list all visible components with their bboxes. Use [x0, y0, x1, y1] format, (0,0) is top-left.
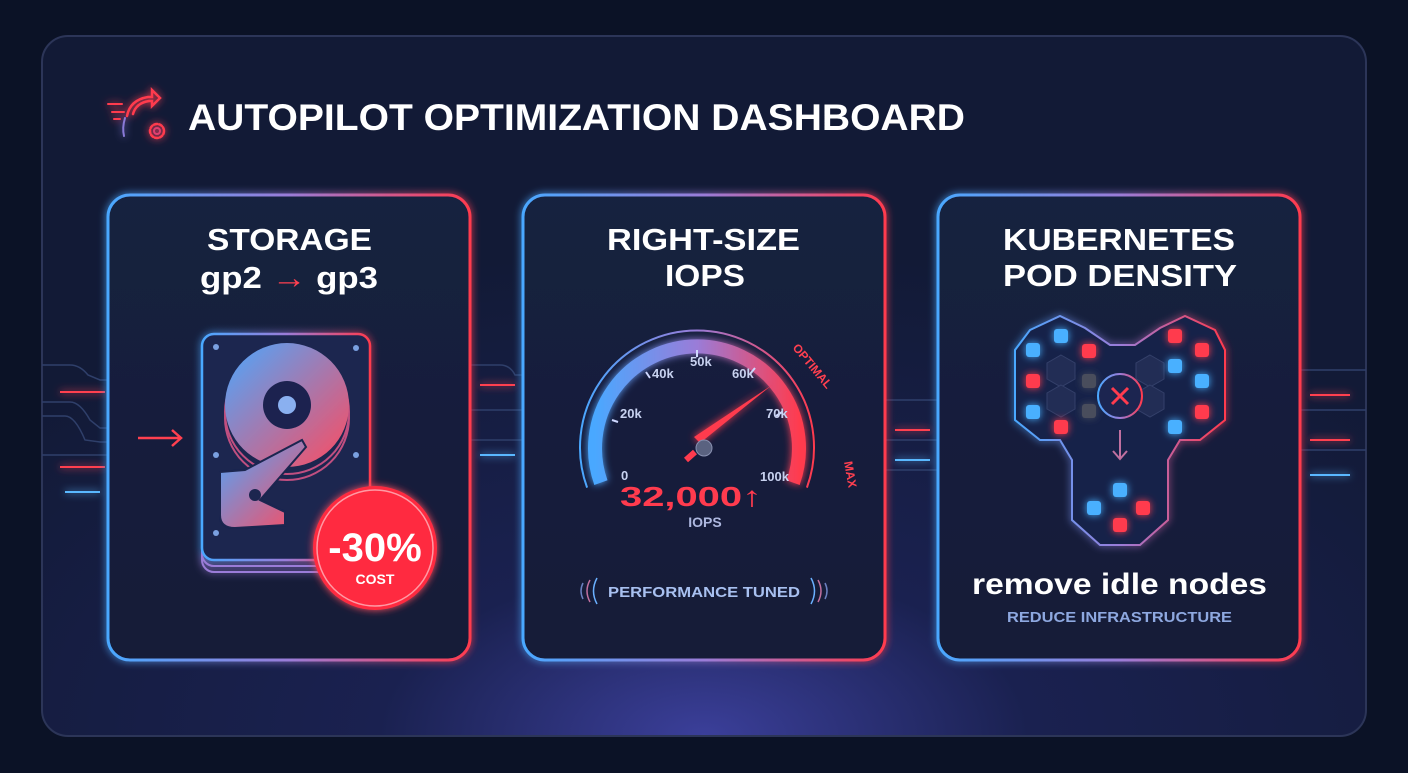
needle — [694, 385, 772, 443]
label: performance tuned — [581, 578, 827, 604]
panel: kubernetes — [938, 195, 1300, 660]
gauge: 70k — [766, 406, 788, 421]
heading: storage: STORAGE — [207, 222, 372, 257]
panel: kubernetes: REDUCE INFRASTRUCTURE — [1007, 609, 1232, 626]
badge: -30% cost: COST — [356, 571, 395, 587]
gauge: 0 — [621, 468, 628, 483]
badge: -30% cost — [313, 486, 437, 610]
badge: -30% cost: -30% — [328, 526, 422, 570]
gauge: 20k — [620, 406, 642, 421]
value: 32,000 iops: 32,000↑ — [620, 481, 762, 512]
panel: storage — [108, 195, 470, 660]
gauge: OPTIMAL — [790, 341, 835, 391]
icon: autopilot arrow gear — [108, 90, 164, 138]
gauge: 100k — [760, 469, 790, 484]
panel: right-size iops: IOPS — [688, 514, 722, 530]
gauge: MAX — [841, 460, 859, 489]
panel: right-size iops: IOPS — [665, 258, 745, 293]
circuit lines — [42, 365, 1366, 470]
icon: remove x — [1098, 374, 1142, 418]
gauge: 40k — [652, 366, 674, 381]
gauge: 50k — [690, 354, 712, 369]
panel: storage: gp2 → gp3 — [200, 260, 378, 295]
text: remove idle nodes: remove idle nodes — [972, 568, 1267, 601]
title: AUTOPILOT OPTIMIZATION DASHBOARD — [188, 97, 965, 138]
heading: iops: RIGHT-SIZE — [607, 222, 800, 257]
cluster diagram — [1015, 316, 1225, 545]
gauge: 60k — [732, 366, 754, 381]
panel: right-size iops — [523, 195, 885, 660]
label: performance tuned: PERFORMANCE TUNED — [608, 584, 800, 601]
icon: hard drive — [202, 334, 370, 572]
panel: kubernetes: POD DENSITY — [1003, 258, 1237, 293]
arrow into drive — [138, 430, 181, 446]
heading: kubernetes: KUBERNETES — [1003, 222, 1235, 257]
gauge — [580, 330, 859, 489]
arrow down — [1113, 430, 1127, 459]
